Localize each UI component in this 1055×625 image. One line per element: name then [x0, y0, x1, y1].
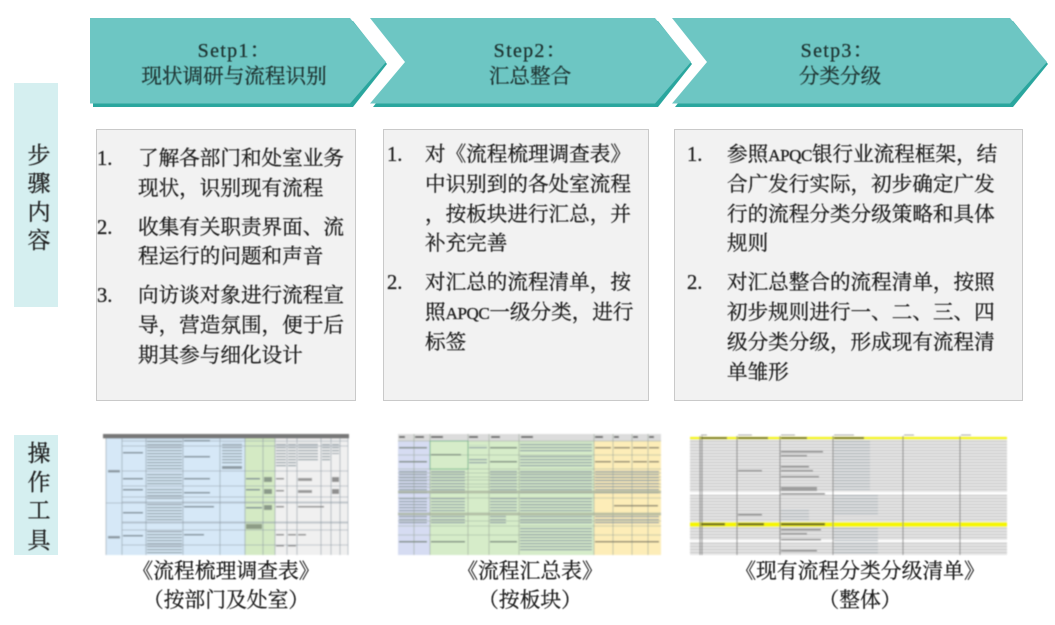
side label: 操作工具: 工	[28, 498, 50, 523]
panel: step 3 content: 单雏形	[727, 362, 789, 384]
panel: step 1 content	[96, 129, 356, 401]
arrow: step 1 chevron	[90, 18, 387, 107]
panel: step 1 content: 2.	[97, 216, 112, 238]
panel: step 3 content: 初步规则进行一、二、三、四	[727, 302, 995, 324]
side label: 步骤内容: 容	[28, 228, 50, 253]
panel: step 3 content: 级分类分级，形成现有流程清	[727, 332, 995, 354]
panel: step 2 content: 2.	[387, 272, 402, 294]
panel: step 3 content: 1.	[687, 144, 702, 166]
caption: 流程汇总表: （按板块）	[478, 589, 582, 612]
caption: 现有流程分类分级清单: 《现有流程分类分级清单》	[735, 560, 985, 583]
panel: step 2 content: 照APQC一级分类，进行	[425, 302, 634, 324]
panel: step 3 content: 规则	[727, 232, 768, 254]
panel: step 3 content: 参照APQC银行业流程框架，结	[727, 144, 997, 166]
side label: 操作工具: 具	[28, 528, 50, 553]
panel: step 1 content: 收集有关职责界面、流	[138, 216, 344, 238]
heading: step 1	[141, 40, 327, 88]
heading: step 3: 分类分级	[799, 66, 881, 88]
panel: step arrows	[90, 18, 1048, 107]
heading: step 3	[799, 40, 882, 88]
heading: step 1: 现状调研与流程识别	[141, 66, 327, 88]
panel: step 1 content: 导，营造氛围，便于后	[138, 314, 344, 336]
panel: step 1 content: 1.	[97, 148, 112, 170]
panel: step 1 content: 期其参与细化设计	[138, 344, 303, 366]
heading: step 2	[489, 40, 572, 88]
panel: step 1 content: 程运行的问题和声音	[138, 246, 323, 268]
panel: step 3 content: 合广发行实际，初步确定广发	[727, 174, 995, 196]
caption: 流程汇总表	[457, 559, 603, 612]
panel: step 1 content: 3.	[97, 284, 112, 306]
panel: step 2 content: 对《流程梳理调查表》	[425, 144, 631, 166]
caption: 流程梳理调查表: 《流程梳理调查表》	[132, 560, 320, 583]
panel: step 3 content: 2.	[687, 272, 702, 294]
caption: 流程汇总表: 《流程汇总表》	[457, 560, 603, 583]
panel: step 2 content: 对汇总的流程清单，按	[425, 272, 631, 294]
panel: step 2 content: 1.	[387, 144, 402, 166]
arrow: step 2 chevron	[370, 18, 692, 107]
panel: step 2 content: 补充完善	[425, 232, 507, 254]
side label: 步骤内容: 内	[28, 200, 50, 225]
panel: step 2 content	[383, 129, 649, 401]
panel: step 2 content: 中识别到的各处室流程	[425, 174, 631, 196]
caption: 流程梳理调查表: （按部门及处室）	[143, 589, 309, 612]
panel: step 3 content: 行的流程分类分级策略和具体	[727, 204, 995, 226]
side label: 步骤内容	[14, 83, 58, 307]
heading: step 2: Step2：	[494, 40, 566, 62]
heading: step 3: Setp3：	[801, 40, 873, 62]
caption: 现有流程分类分级清单	[735, 559, 985, 612]
panel: step 1 content: 现状，识别现有流程	[138, 178, 323, 200]
heading: step 2: 汇总整合	[489, 66, 571, 88]
arrow: step 3 chevron	[672, 18, 1048, 107]
panel: step 1 content: 向访谈对象进行流程宣	[138, 284, 344, 306]
panel: step 1 content: 了解各部门和处室业务	[138, 148, 344, 170]
heading: step 1: Setp1：	[198, 40, 270, 62]
side label: 步骤内容: 骤	[28, 171, 50, 196]
side label: 步骤内容: 步	[28, 143, 50, 168]
side label: 操作工具: 操	[28, 441, 50, 466]
caption: 现有流程分类分级清单: （整体）	[818, 589, 902, 612]
panel: step 2 content: 标签	[425, 332, 466, 354]
caption: 流程梳理调查表	[132, 559, 320, 612]
side label: 操作工具	[14, 435, 58, 555]
side label: 操作工具: 作	[28, 470, 50, 495]
panel: step 3 content	[674, 129, 1023, 401]
panel: step 2 content: ，按板块进行汇总，并	[425, 204, 631, 226]
panel: step 3 content: 对汇总整合的流程清单，按照	[727, 272, 995, 294]
